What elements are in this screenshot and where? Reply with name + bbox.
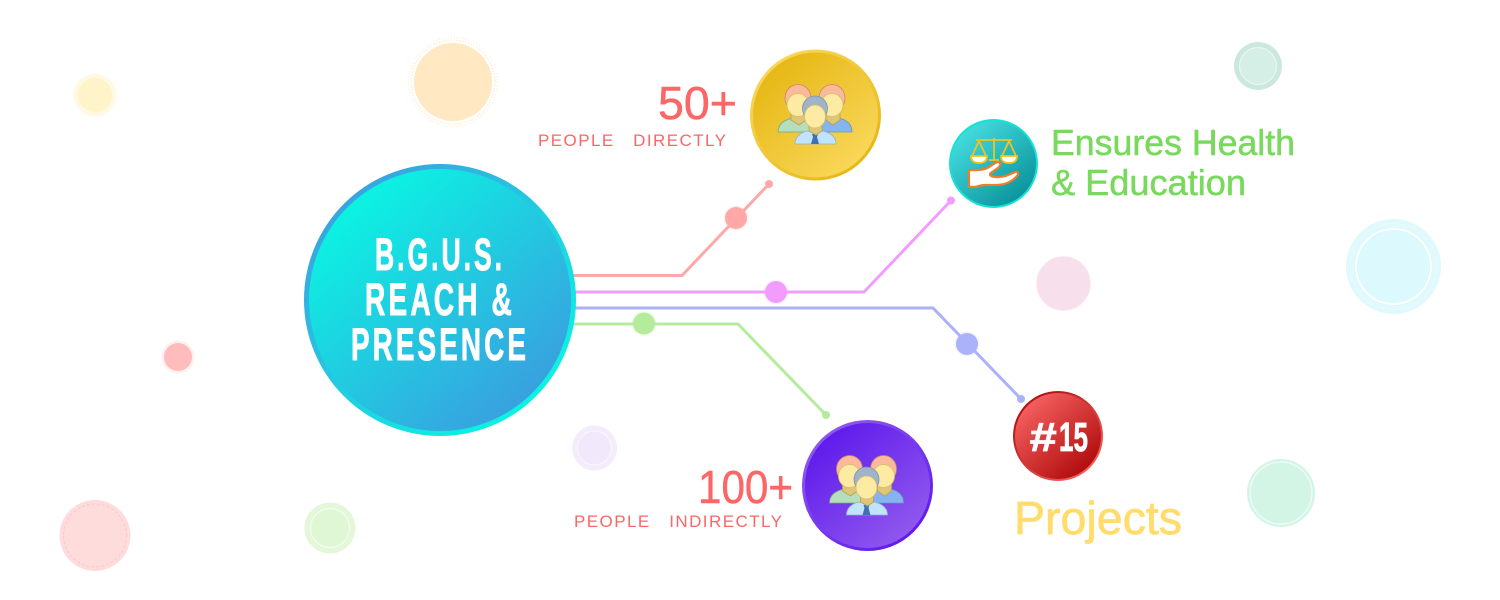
icon: open hand (969, 162, 1018, 187)
label: ensures health and education: Ensures Health (1051, 122, 1295, 163)
connector: projects (570, 308, 1025, 403)
background bubble: mint (1247, 459, 1315, 527)
background bubble: coral (162, 340, 194, 374)
stat: 100+ people indirectly: PEOPLE INDIRECTLY (574, 512, 782, 531)
connector: people indirectly (570, 311, 830, 419)
connector: health and education (570, 196, 955, 304)
badge: scales and hand (949, 119, 1038, 208)
label: ensures health and education (1051, 122, 1295, 203)
icon: group of people (830, 456, 904, 515)
central title: B.G.U.S. (375, 229, 505, 280)
stat: 100+ people indirectly: 100+ (698, 461, 793, 513)
badge: gold people (750, 50, 881, 180)
badge: #15 (1013, 391, 1103, 481)
badge: #15: 15 (1059, 414, 1088, 460)
central title: PRESENCE (351, 319, 529, 370)
stat: 100+ people indirectly (574, 461, 793, 531)
central title: REACH & (365, 274, 515, 325)
connector: people directly (570, 180, 773, 276)
background bubble: light cyan (1346, 219, 1441, 314)
label: ensures health and education: & Education (1051, 162, 1246, 203)
icon: group of people (778, 84, 852, 144)
background bubble: sage green (1234, 42, 1282, 90)
stat: 50+ people directly: 50+ (658, 77, 737, 129)
label: projects: Projects (1014, 492, 1182, 544)
central title (351, 229, 529, 370)
background bubble: pale green (304, 502, 356, 554)
background bubble: pink dashed (60, 500, 130, 571)
badge: #15: # (1029, 414, 1056, 460)
background bubble: orange dotted (408, 38, 498, 126)
badge: purple people (802, 420, 933, 551)
stat: 50+ people directly: PEOPLE DIRECTLY (538, 131, 726, 150)
stat: 50+ people directly (538, 77, 737, 150)
background bubble: pale yellow (74, 74, 116, 116)
background bubble: pale lavender (572, 426, 617, 470)
icon: scales of justice (971, 138, 1017, 163)
background bubble: pale pink (1036, 256, 1090, 310)
central circle (304, 164, 576, 436)
